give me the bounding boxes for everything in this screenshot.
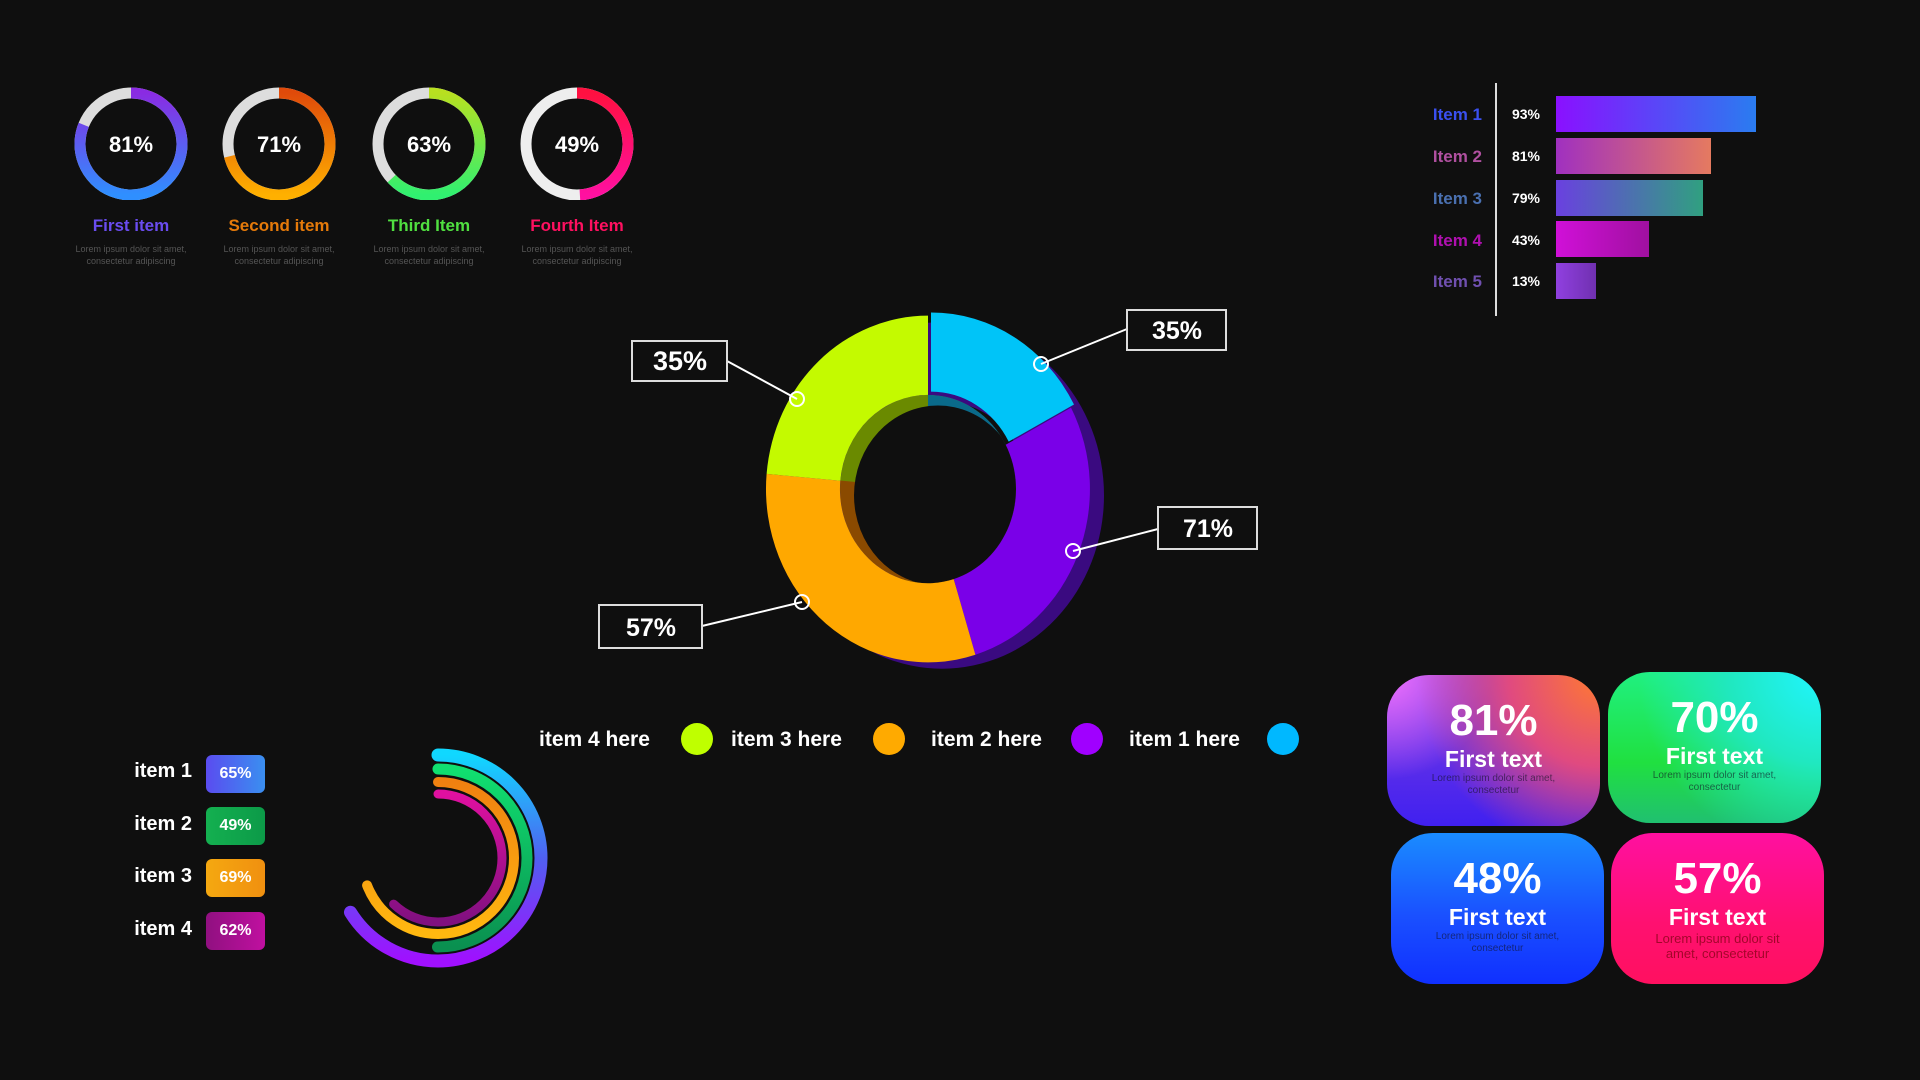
bottom-left list: 62% [219, 922, 252, 939]
list item 4 [134, 912, 265, 950]
card 70%: 70% [1670, 693, 1759, 742]
bar row 5: Item 5 [1433, 272, 1482, 291]
text: consectetur adipiscing [532, 256, 622, 266]
card 81%: Lorem ipsum dolor sit amet, consectetur [1432, 773, 1555, 796]
ring labels: First item [93, 216, 169, 235]
donut side shadow [780, 322, 1104, 669]
callout 35% right: 35% [1152, 317, 1202, 345]
card 70%: First text [1666, 743, 1763, 769]
list item 1 [134, 755, 265, 793]
callout 57%: 57% [626, 614, 676, 642]
card 57%: First text [1669, 904, 1766, 930]
text: consectetur adipiscing [234, 256, 324, 266]
callout 35% left [632, 341, 804, 406]
callout 35% left: 35% [653, 346, 707, 376]
bottom-left list [134, 755, 265, 950]
bottom-left list: 69% [219, 869, 252, 886]
segment green [767, 316, 928, 481]
bar row 2 [1433, 138, 1711, 174]
arc 1 [335, 755, 541, 961]
legend item 2: item 2 here [931, 728, 1042, 751]
ring 1: 81% [109, 132, 153, 157]
bar row 2: 81% [1512, 148, 1541, 164]
card 81%: First text [1445, 746, 1542, 772]
list item 2 [134, 807, 265, 845]
legend item 2 [931, 723, 1103, 755]
text: Third Item [388, 216, 470, 235]
donut legend [539, 723, 1299, 755]
text: Lorem ipsum dolor sit amet, [521, 244, 633, 254]
callout 35% right [1034, 310, 1226, 371]
segment cyan [931, 312, 1074, 442]
legend item 1 [1129, 723, 1299, 755]
text: consectetur adipiscing [384, 256, 474, 266]
card 48%: Lorem ipsum dolor sit amet, consectetur [1436, 931, 1559, 954]
legend item 3: item 3 here [731, 728, 842, 751]
bar row 4 [1433, 221, 1649, 257]
card 70%: Lorem ipsum dolor sit amet, consectetur [1653, 770, 1776, 793]
3D donut chart [598, 309, 1258, 669]
ring descriptions [75, 244, 187, 266]
inner walls [840, 395, 1022, 585]
text: Lorem ipsum dolor sit amet, [373, 244, 485, 254]
bar row 5: 13% [1512, 273, 1541, 289]
radial bar chart [344, 748, 548, 968]
bar row 4: 43% [1512, 232, 1541, 248]
legend item 4: item 4 here [539, 728, 650, 751]
card 57%: 57% [1673, 854, 1762, 903]
ring 1 [80, 93, 182, 195]
ring descriptions: consectetur adipiscing [86, 256, 176, 266]
ring 3 [378, 93, 480, 195]
arc 4 [374, 794, 502, 922]
bottom-left list: 49% [219, 817, 252, 834]
bar row 2: Item 2 [1433, 147, 1482, 166]
legend item 4 [539, 723, 713, 755]
card 57% [1611, 833, 1824, 984]
text: Second item [228, 216, 330, 235]
ring descriptions: Lorem ipsum dolor sit amet, [75, 244, 187, 254]
bar chart [1433, 83, 1756, 316]
callout 57% [599, 595, 809, 648]
arc 3 [362, 782, 514, 934]
text: Lorem ipsum dolor sit amet, [223, 244, 335, 254]
callout 71% [1066, 507, 1257, 558]
bottom-left list: 65% [219, 765, 252, 782]
arc 2 [349, 769, 527, 947]
card 81% [1387, 675, 1600, 826]
list item 3 [134, 859, 265, 897]
bar row 1: Item 1 [1433, 105, 1482, 124]
bar row 4: Item 4 [1433, 231, 1483, 250]
card 48%: First text [1449, 904, 1546, 930]
bar row 3: Item 3 [1433, 189, 1482, 208]
legend item 3 [731, 723, 905, 755]
bar row 5 [1433, 263, 1596, 299]
card 70% [1608, 672, 1821, 823]
card 48% [1391, 833, 1604, 984]
bar row 1: 93% [1512, 106, 1541, 122]
callout 71%: 71% [1183, 515, 1233, 543]
card 57%: Lorem ipsum dolor sit amet, consectetur [1655, 931, 1780, 961]
ring 2: 71% [257, 132, 301, 157]
segment purple [954, 408, 1090, 655]
text: Fourth Item [530, 216, 624, 235]
card 81%: 81% [1449, 696, 1538, 745]
bar row 3: 79% [1512, 190, 1541, 206]
segment orange [766, 474, 975, 662]
progress rings [74, 88, 634, 200]
ring 2 [228, 93, 330, 195]
ring 3: 63% [407, 132, 451, 157]
legend item 1: item 1 here [1129, 728, 1240, 751]
bottom-left list: item 3 [134, 865, 192, 887]
card 48%: 48% [1453, 854, 1542, 903]
bottom-left list: item 4 [134, 918, 192, 940]
ring 4: 49% [555, 132, 599, 157]
bottom-left list: item 2 [134, 813, 192, 835]
bar row 1 [1433, 96, 1756, 132]
ring 4 [526, 93, 628, 195]
bottom-left list: item 1 [134, 760, 192, 782]
bar row 3 [1433, 180, 1703, 216]
